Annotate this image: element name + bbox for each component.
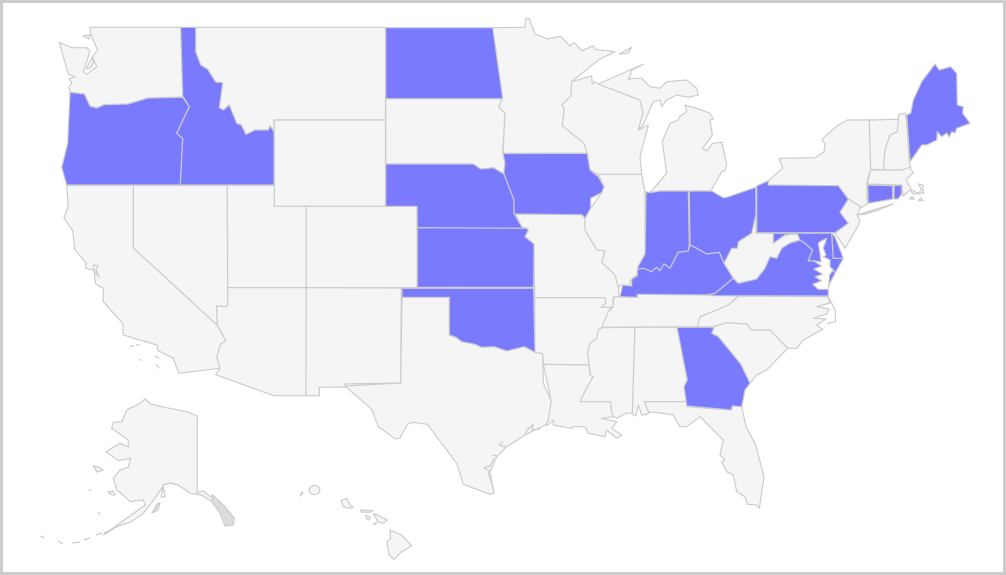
state: Rhode Island [894,185,902,199]
Hawaii: Oahu [341,498,353,508]
state: Colorado [306,206,417,288]
state: Florida [644,402,764,508]
North Carolina: mainland [697,296,830,348]
Alaska: mainland [103,399,213,535]
state: Ohio [689,187,756,263]
state: New Jersey [835,199,861,248]
state: New York [768,120,871,208]
state: Arizona [216,288,306,396]
Massachusetts: mainland [867,167,924,196]
Massachusetts: Nantucket [918,198,923,200]
Virginia: eastern shore [828,270,835,288]
state: Missouri [515,214,619,307]
Michigan: Isle Royale [619,47,632,54]
state: Nebraska [386,164,527,228]
state: Iowa [503,153,604,218]
Alaska: Panhandle islands [212,495,234,526]
state: Wyoming [274,120,386,206]
state: Kentucky [620,245,733,297]
Washington: San Juan islands [83,35,90,39]
state: Nevada [133,185,228,325]
state: Minnesota [493,18,615,153]
Hawaii: Niihau [300,492,303,496]
Hawaii: Kahoolawe [373,522,377,524]
state: Michigan [598,47,727,193]
state: Maine [907,64,970,162]
islands: California Channel Islands [130,345,159,368]
state: Hawaii [300,486,412,559]
state: Louisiana [543,364,622,438]
state: Kansas [417,228,534,287]
state: Alaska [40,399,234,544]
Hawaii: Molokai [361,510,373,512]
Michigan: upper peninsula [598,64,698,130]
Hawaii: Lanai [366,515,371,520]
state: New York, Long Island [857,204,893,215]
state: South Dakota [386,99,505,174]
Washington: mainland [59,27,183,108]
state: Wisconsin [562,76,648,174]
Massachusetts: Martha's Vineyard [910,196,914,199]
state: Arkansas [535,298,611,365]
Virginia: mainland [710,240,828,296]
state: New Hampshire [883,113,911,170]
state: North Carolina [697,296,836,348]
state: California [64,185,226,373]
Hawaii: Kauai [309,486,320,494]
state: Oregon [62,92,189,185]
Texas: Gulf coast bays [484,424,540,491]
state: Alabama [632,327,687,416]
state: South Carolina [712,323,788,383]
Hawaii: Big Island [387,530,412,559]
state: West Virginia [724,214,800,283]
state: Texas [345,297,551,494]
state: Maryland [773,233,843,273]
state: Montana [196,27,386,134]
state: Virginia [710,240,835,296]
state: Pennsylvania [757,181,848,233]
state: Utah [227,185,306,288]
state: Vermont [869,119,899,170]
Alaska: St. Lawrence Island [93,466,103,472]
state: New Mexico [306,288,401,396]
state: Massachusetts [867,167,924,200]
Alaska: Kodiak Island [152,503,160,513]
state: Idaho [177,27,274,185]
Alaska: Nunivak Island [108,491,115,495]
Alaska: Aleutian Islands [40,489,112,544]
state: Oklahoma [402,288,535,352]
state: North Dakota [386,28,503,99]
Texas: mainland [345,297,551,494]
state: Georgia [677,327,750,410]
state: Delaware [832,233,843,258]
state: Tennessee [602,294,738,327]
state: Illinois [585,174,647,287]
North Carolina: Outer Banks [827,297,836,324]
state: Indiana [637,191,689,272]
Washington: Puget Sound islands [86,58,94,69]
state: Connecticut [868,185,893,203]
state: Washington [59,27,183,108]
Hawaii: Maui [373,514,387,523]
Michigan: lower peninsula [650,105,727,193]
state: Mississippi [581,327,635,418]
